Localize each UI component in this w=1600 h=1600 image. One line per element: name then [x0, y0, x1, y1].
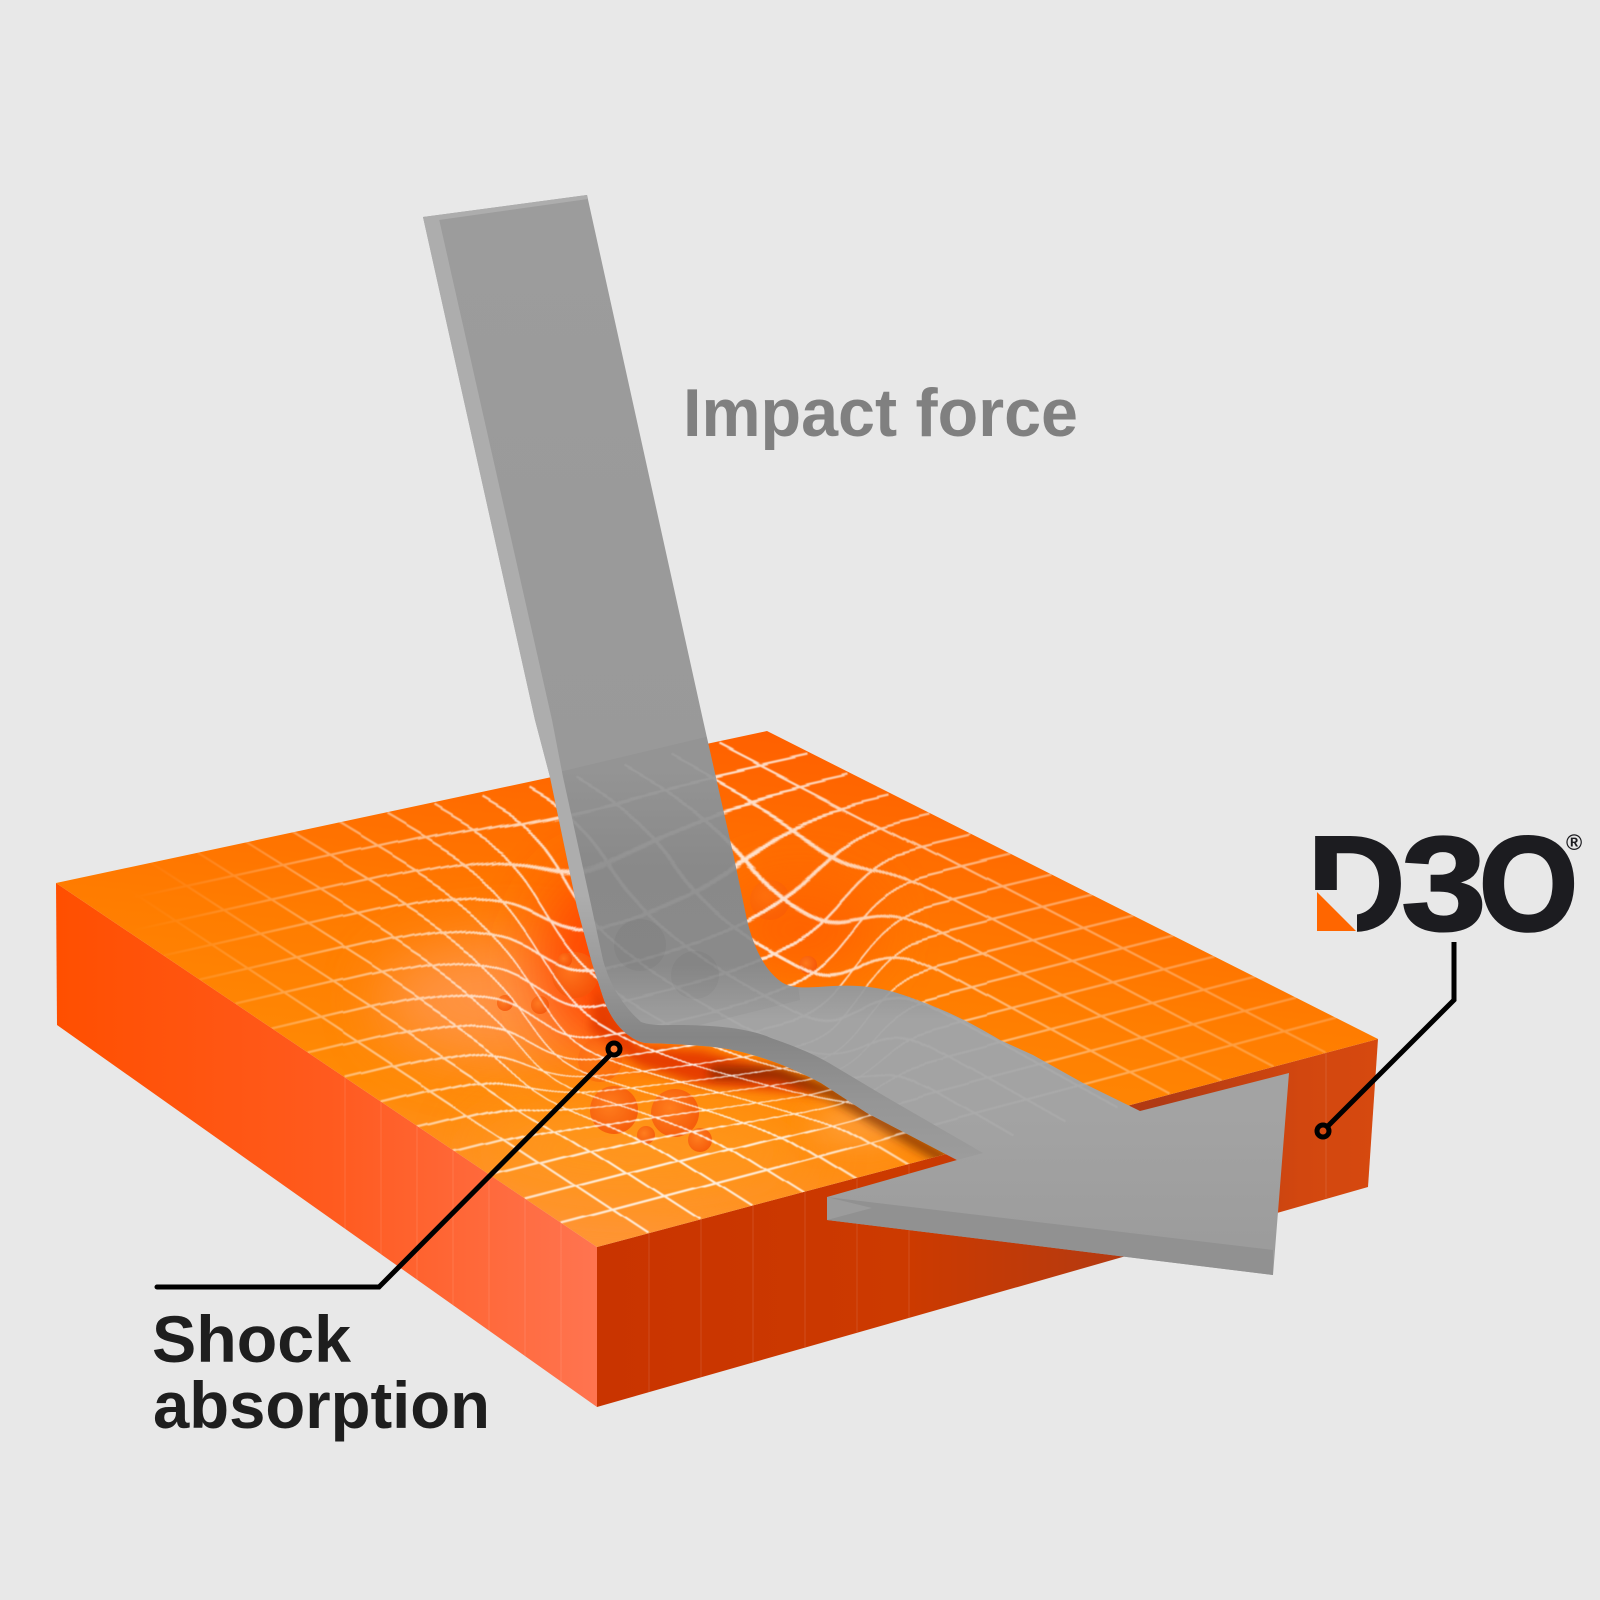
arrowhead underside [827, 1197, 1273, 1275]
label text: absorption [153, 1368, 490, 1442]
block top face [56, 731, 1378, 1247]
heading: impact force: Impact force [683, 375, 1078, 451]
arrow top edge [423, 195, 588, 220]
logo: D3O: O [1479, 809, 1578, 959]
block right face [597, 1039, 1378, 1407]
arrow front face [423, 195, 1289, 1275]
logo: D3O: ® [1566, 830, 1582, 855]
impact glow on surface [92, 741, 1337, 1233]
label text: Shock [152, 1302, 351, 1376]
D3O material block [56, 731, 1378, 1407]
leader line and dot [1317, 942, 1454, 1137]
molecule spheres [497, 880, 817, 1152]
arrow side edge [423, 217, 983, 1160]
logo: D3O: 3 [1401, 808, 1487, 959]
arrowhead tip highlight [827, 1197, 872, 1220]
infographic: D3O impact diagram [56, 195, 1582, 1442]
callout: D3O material [1307, 807, 1582, 1137]
deformed grid lines [92, 741, 1337, 1233]
grey impact force arrow [423, 195, 1289, 1275]
callout: shock absorption [152, 1043, 620, 1442]
logo: D3O [1307, 807, 1582, 960]
logo: D3O: D [1307, 807, 1406, 960]
leader line and dot [157, 1043, 620, 1287]
block left face [56, 883, 597, 1407]
